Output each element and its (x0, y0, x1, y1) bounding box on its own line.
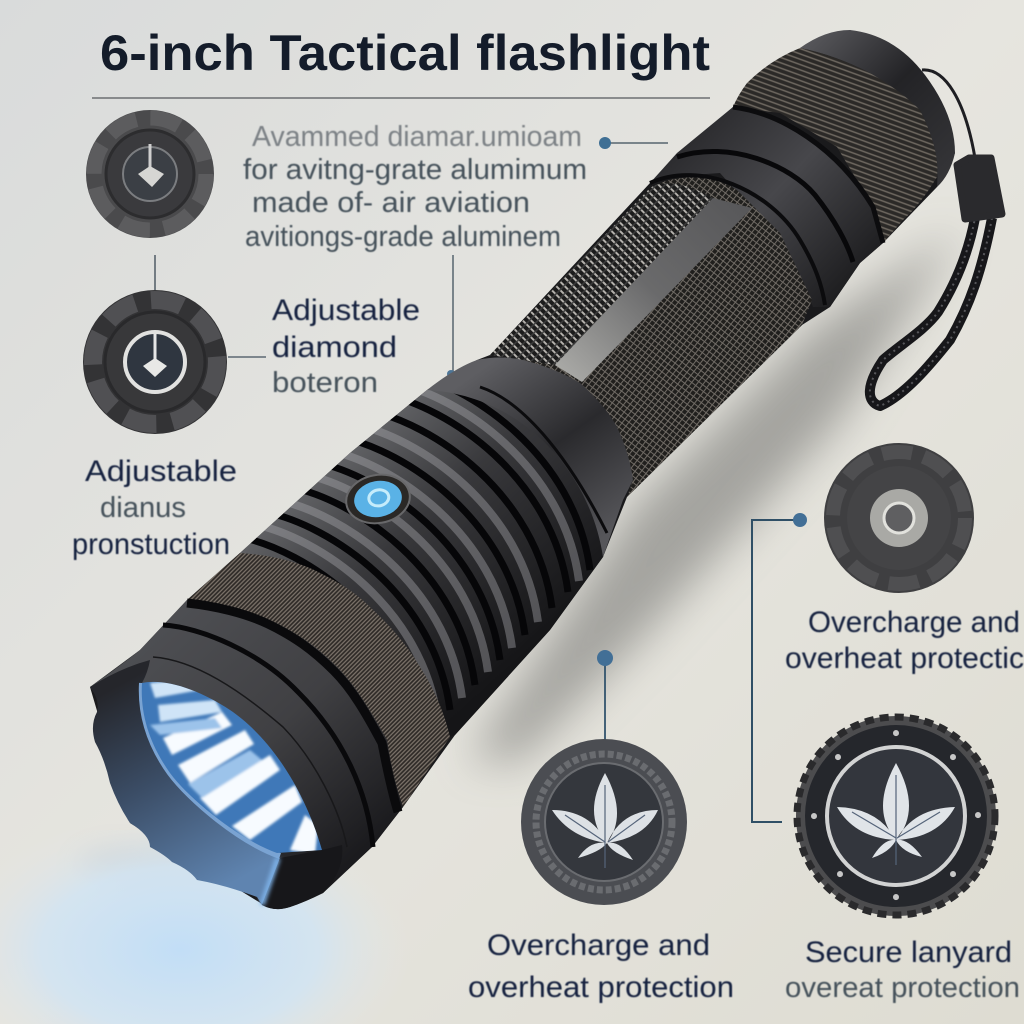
rear knurled grip (733, 48, 937, 243)
grey slot (555, 198, 752, 382)
bezel dark lower edge (262, 845, 342, 909)
text block: overcharge bottom (468, 929, 734, 1004)
connector: body pointer (447, 255, 455, 378)
title: 6-inch Tactical flashlight (100, 25, 710, 81)
text block: adjustable protection: dianus (100, 492, 186, 524)
bezel shadow (80, 850, 220, 882)
blue power button (342, 470, 414, 528)
neck rings (650, 107, 883, 307)
text block: aluminum callout: avitiongs-grade aluminem (245, 221, 561, 253)
head (90, 600, 403, 909)
title rule (92, 97, 710, 99)
text block: overcharge bottom: overheat protection (468, 971, 734, 1004)
icon: leaf coin (521, 739, 687, 905)
upper grip strip (490, 183, 713, 365)
connector: middle dial (228, 356, 266, 358)
ribbed body (240, 390, 604, 736)
main knurled grip (490, 177, 812, 497)
text block: aluminum callout: for avitng-grate alumimum (243, 154, 587, 186)
front knurled band (187, 553, 450, 807)
lanyard (870, 70, 1002, 406)
connector: aluminum callout (599, 137, 668, 149)
connector: right bracket (752, 513, 807, 822)
text block: adjustable protection: Adjustable (85, 455, 237, 488)
collar (427, 358, 633, 557)
lens blue rim (142, 683, 280, 856)
connector: bottom leaf (597, 650, 613, 740)
flashlight shadow (470, 230, 960, 760)
text block: overcharge right: Overcharge and (808, 606, 1020, 639)
text block: aluminum callout: made of- air aviation (252, 187, 530, 219)
flashlight silhouette base (90, 30, 955, 907)
text block: adjustable diamond (272, 294, 420, 399)
text block: adjustable protection: pronstuction (72, 528, 230, 561)
tail cap (800, 30, 955, 187)
text block: overcharge right: overheat protectic (785, 642, 1024, 675)
bezel glint (262, 858, 278, 905)
text block: adjustable diamond: diamond (272, 331, 397, 364)
connector: dial to dial (154, 255, 156, 290)
text block: secure lanyard: overeat protection (785, 972, 1020, 1004)
icon: middle diamond dial (83, 290, 227, 434)
text block: adjustable diamond: boteron (272, 367, 378, 399)
text block: adjustable diamond: Adjustable (272, 294, 420, 327)
text block: overcharge bottom: Overcharge and (487, 929, 710, 962)
icon: top diamond dial (86, 110, 214, 238)
text block: secure lanyard: Secure lanyard (805, 936, 1012, 969)
scalloped bezel face (90, 660, 280, 905)
text block: overcharge right (785, 606, 1024, 675)
text block: aluminum callout (243, 121, 587, 253)
lens (142, 682, 322, 853)
icon: lanyard coin (796, 716, 996, 916)
light glow (0, 830, 410, 1024)
text block: aluminum callout: Avammed diamar.umioam (252, 121, 582, 153)
icon: right button coin (824, 443, 974, 593)
text block: adjustable protection (72, 455, 237, 561)
text block: secure lanyard (785, 936, 1020, 1004)
